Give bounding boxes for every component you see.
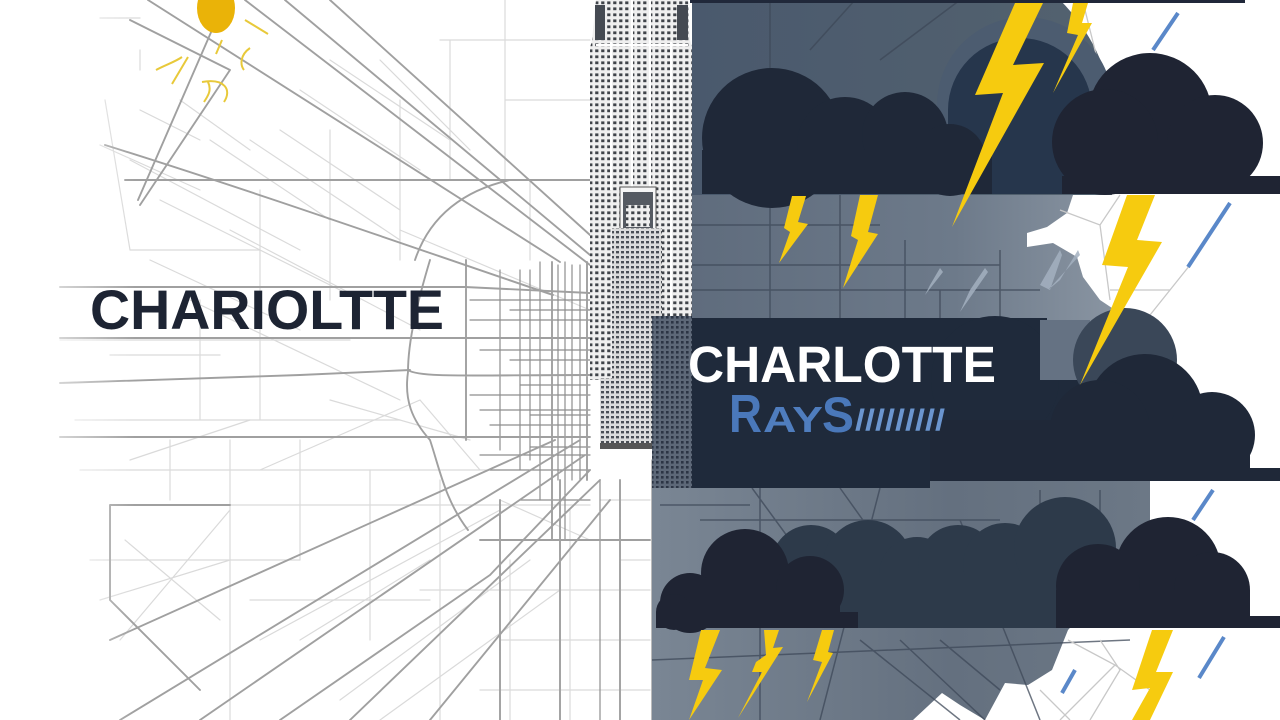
cloud: lower right	[1056, 517, 1280, 628]
bolt: lower right	[1132, 630, 1173, 720]
tower crown	[595, 5, 605, 40]
black top edge	[690, 0, 1245, 3]
panel: storm lower	[652, 480, 1150, 720]
tower shaft pilasters	[596, 0, 688, 380]
cloud: band left bump	[931, 316, 1059, 444]
bolt: lower 2	[738, 630, 783, 718]
cloud: lower left	[656, 529, 858, 633]
cloud: top left	[702, 68, 992, 208]
tower	[590, 0, 692, 488]
title: left: CHARIOLTTE	[90, 278, 444, 341]
title: CHARLOTTE panel: CHARLOTTE	[688, 336, 996, 393]
left fade overlay	[0, 0, 135, 720]
bolt: lower 3	[807, 630, 834, 702]
cloud: mid right	[930, 354, 1280, 481]
bolt: lower 1	[689, 630, 722, 720]
cloud: top right	[1052, 53, 1280, 195]
cloud: lower mid	[771, 497, 1116, 628]
street map: left half	[60, 0, 652, 720]
light map lines on white, right side	[1040, 10, 1190, 720]
bolt: mid right	[1080, 195, 1162, 385]
bolt: large top	[952, 3, 1044, 227]
tower emblem	[620, 187, 656, 229]
bolt: mid 1	[779, 196, 808, 263]
subtitle: rain: AY	[763, 399, 823, 440]
lightning bolts	[689, 3, 1173, 720]
main roads	[60, 0, 650, 720]
downtown fine grid	[470, 262, 652, 720]
subtitle: rain	[729, 384, 946, 444]
clouds	[656, 0, 1280, 633]
tower base	[600, 378, 652, 443]
subtitle: rain: /////////	[855, 404, 946, 437]
bolt: top small	[1053, 3, 1092, 93]
rain streaks	[1062, 13, 1230, 693]
panel: storm top	[692, 0, 1112, 195]
road lines over storm	[652, 0, 1130, 720]
tower lower shaft	[612, 228, 662, 378]
panel: storm middle	[692, 195, 1130, 360]
cloud: mid behind	[1040, 308, 1177, 412]
icon: sun top left	[156, 0, 268, 102]
rain streaks behind clouds: pale	[925, 250, 1080, 312]
cloud: top center with halo	[937, 17, 1113, 194]
tower shadow side	[652, 316, 692, 488]
bolt: mid 2	[843, 195, 878, 288]
subtitle: rain: S	[822, 387, 854, 443]
panel: title band	[652, 318, 1100, 488]
subtitle: rain: R	[729, 384, 762, 444]
